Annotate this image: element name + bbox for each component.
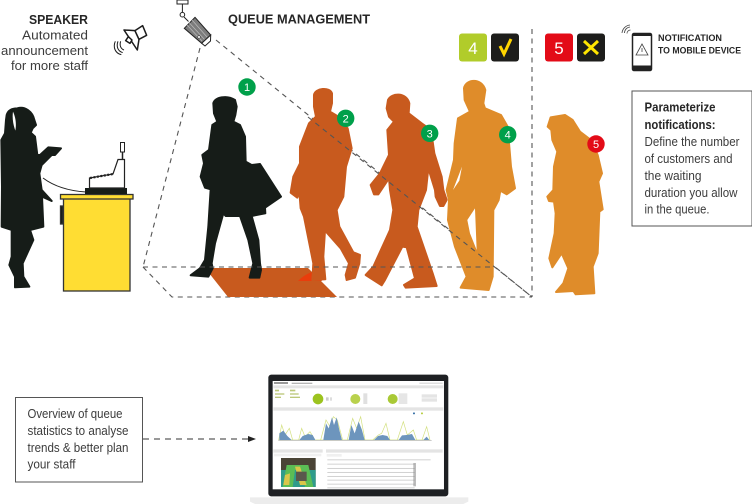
dashboard header [273, 382, 443, 453]
panel: queue statistics overview: your staff [28, 458, 76, 472]
customer 2 silhouette [291, 89, 360, 280]
speaker text block: for more staff [11, 58, 88, 73]
checkout desk [60, 194, 133, 291]
laptop with dashboard [250, 375, 468, 504]
notification label: TO MOBILE DEVICE [658, 46, 741, 56]
panel: parameterize notifications: Parameterize [644, 100, 716, 114]
cashier silhouette [1, 108, 61, 287]
panel: parameterize notifications: Define the number [644, 135, 740, 149]
icon: speaker [114, 26, 147, 55]
number marker 2: 2 [343, 113, 349, 125]
floor marker [298, 272, 322, 281]
cash register [43, 142, 127, 194]
panel: parameterize notifications: in the queue. [644, 202, 710, 216]
panel: parameterize notifications [632, 91, 752, 226]
panel: parameterize notifications: notifications: [644, 118, 716, 132]
number marker 1 [238, 78, 256, 96]
icon: ceiling camera [177, 0, 211, 46]
panel: queue statistics overview [16, 398, 142, 482]
panel: parameterize notifications: duration you allow [644, 186, 738, 200]
speaker text block: Automated [22, 28, 88, 42]
arrow: statistics to dashboard [143, 436, 256, 442]
number marker 5: 5 [593, 139, 599, 151]
number marker 3 [421, 125, 438, 142]
panel: parameterize notifications: the waiting [644, 169, 702, 183]
customer 4 limb gaps [453, 167, 477, 250]
number marker 2 [337, 110, 354, 127]
customer 4 silhouette [447, 81, 515, 290]
dashboard screen [273, 381, 444, 489]
ponytail gap [13, 112, 16, 131]
icon: mobile phone with alert [622, 25, 652, 70]
badge: 5 exceeded: 5 [554, 39, 564, 58]
notification label: NOTIFICATION [658, 33, 722, 43]
area chart [278, 412, 432, 440]
number marker 4: 4 [505, 130, 511, 142]
badge: 4 allowed [459, 34, 519, 62]
camera field of view dashed lines [143, 29, 532, 297]
speaker text block: SPEAKER [29, 12, 89, 27]
customer 3 silhouette [366, 95, 447, 288]
laptop bezel [268, 375, 448, 496]
panel: queue statistics overview: trends & better plan [28, 441, 129, 455]
laptop base [250, 497, 468, 504]
speaker text block [1, 12, 89, 73]
number marker 5 [587, 135, 605, 153]
number marker 4 [499, 126, 516, 143]
field of view line over customers [143, 117, 532, 297]
customer 1 silhouette [191, 97, 281, 278]
floor zone [205, 268, 337, 297]
panel: queue statistics overview: statistics to analyse [28, 424, 129, 438]
notification label [658, 33, 741, 56]
badge: 5 exceeded [545, 34, 605, 62]
speaker text block: announcement [1, 43, 88, 58]
donut charts [313, 393, 407, 404]
badge: 4 allowed: 4 [468, 39, 478, 58]
panel: parameterize notifications: of customers and [644, 152, 733, 166]
panel: queue statistics overview: Overview of queue [28, 407, 123, 421]
summary labels [275, 390, 300, 398]
data table [274, 454, 431, 488]
heatmap image [281, 458, 316, 487]
customer 5 silhouette [547, 115, 603, 294]
number marker 3: 3 [427, 128, 433, 140]
queue management heading: QUEUE MANAGEMENT [228, 12, 370, 26]
number marker 1: 1 [244, 82, 250, 94]
